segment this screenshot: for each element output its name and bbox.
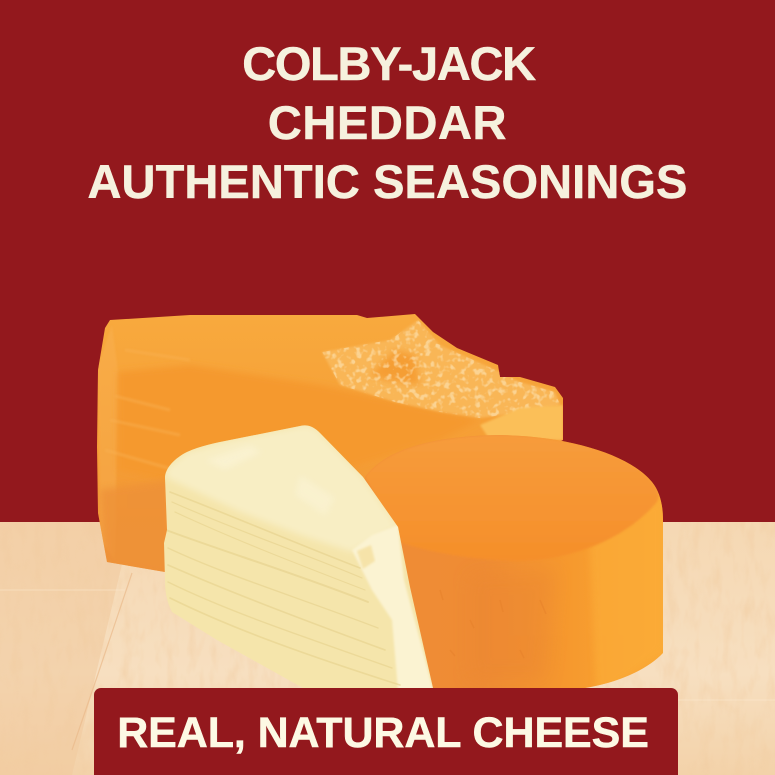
cheese: colby-jack block — [90, 310, 570, 580]
cheese: cheddar round — [360, 430, 670, 695]
title line 1: COLBY-JACK — [242, 37, 535, 90]
title line 2: CHEDDAR — [268, 96, 507, 149]
title — [88, 37, 688, 208]
wooden table and cheese illustration — [0, 314, 775, 775]
callout banner — [94, 688, 678, 775]
cheese: white cheddar wedge — [160, 420, 440, 690]
title line 3: AUTHENTIC SEASONINGS — [88, 155, 688, 208]
wood table — [0, 522, 775, 775]
banner text: REAL, NATURAL CHEESE — [117, 709, 649, 757]
